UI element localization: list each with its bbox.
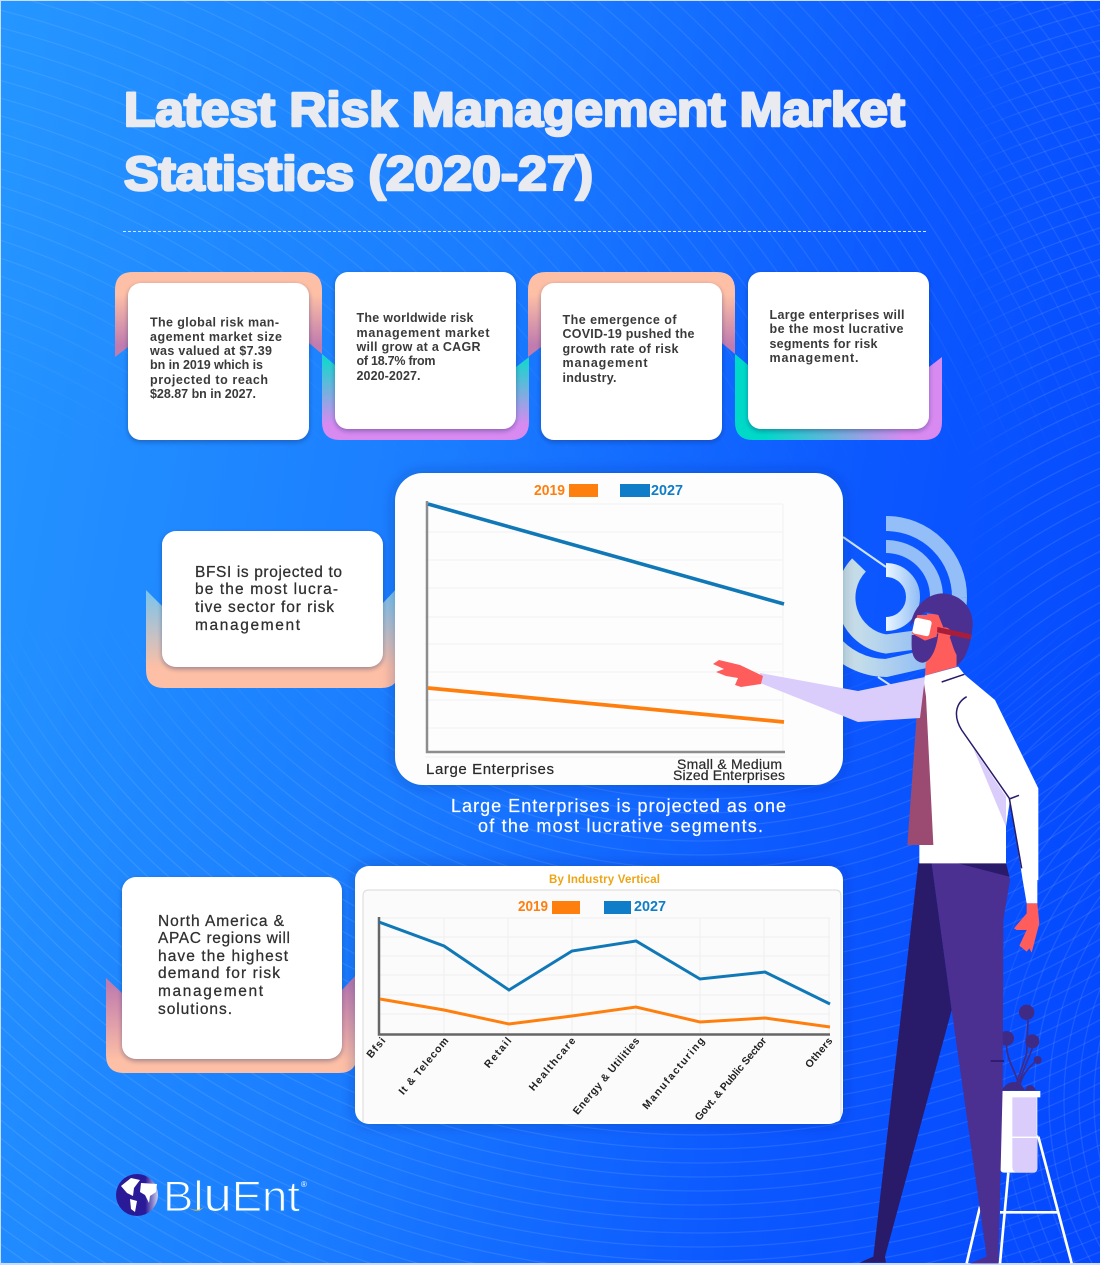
BFSI text: management — [195, 617, 301, 634]
North America text: management — [158, 983, 264, 1000]
BFSI text: tive sector for risk — [195, 599, 334, 616]
chart legend: 2027 — [651, 482, 683, 499]
line: 2019 — [428, 688, 784, 722]
pot — [1000, 1091, 1040, 1173]
North America text: solutions. — [158, 1001, 232, 1018]
COVID-19 text: management — [562, 356, 648, 370]
North America text: APAC regions will — [158, 930, 290, 947]
large enterprises text: Large enterprises will — [770, 308, 904, 322]
market size text: was valued at $7.39 — [149, 344, 272, 358]
panel: enterprise size line chart — [395, 473, 843, 785]
icon: concentric rings — [830, 524, 960, 685]
market size text: The global risk man- — [150, 316, 279, 330]
COVID-19 text: COVID-19 pushed the — [562, 327, 695, 341]
North America text — [158, 913, 290, 1018]
line: 2027 — [379, 922, 830, 1004]
CAGR text: management market — [356, 326, 490, 340]
large enterprises text — [770, 308, 904, 365]
panel: CAGR card — [322, 272, 529, 440]
caption: of the most lucrative segments. — [478, 816, 763, 836]
COVID-19 text: industry. — [562, 371, 616, 385]
category labels: It & Telecom — [396, 1035, 451, 1097]
hand — [713, 660, 763, 687]
title: Statistics (2020-27) — [124, 148, 593, 201]
line: 2019 — [380, 999, 830, 1027]
North America text: demand for risk — [158, 965, 280, 982]
title — [124, 84, 905, 201]
market size text — [149, 316, 282, 401]
trousers — [859, 863, 1039, 1263]
COVID-19 text: growth rate of risk — [562, 342, 679, 356]
category labels: Healthcare — [527, 1035, 578, 1093]
panel: large enterprises card — [735, 272, 942, 440]
CAGR text: of 18.7% from — [356, 354, 436, 368]
category labels: Retail — [482, 1035, 514, 1071]
illustration: presenter — [713, 593, 1039, 1263]
panel: BFSI card — [146, 531, 399, 688]
wordmark: BluEnt — [163, 1169, 300, 1222]
caption — [451, 796, 786, 836]
stool — [967, 1137, 1072, 1263]
arm — [760, 673, 925, 722]
panel: North America card — [106, 877, 357, 1073]
CAGR text: will grow at a CAGR — [356, 340, 480, 354]
chart legend: 2027 — [634, 898, 666, 915]
North America text: have the highest — [158, 948, 289, 965]
chart legend: 2019 — [518, 898, 548, 915]
CAGR text: 2020-2027. — [356, 369, 420, 383]
illustration: plant stool — [967, 1005, 1072, 1263]
tie — [907, 678, 933, 845]
large enterprises text: management. — [770, 351, 858, 365]
panel: market size card — [115, 272, 322, 440]
icon: globe — [116, 1174, 158, 1216]
chart title: By Industry Vertical — [549, 874, 660, 886]
category labels: Others — [803, 1035, 835, 1071]
market size text: bn in 2019 which is — [150, 358, 263, 372]
line: 2027 — [428, 504, 784, 604]
axis labels: Small & Medium — [677, 756, 782, 772]
title: Latest Risk Management Market — [124, 84, 905, 137]
CAGR text: The worldwide risk — [356, 311, 474, 325]
caption: Large Enterprises is projected as one — [451, 796, 786, 816]
shirt — [919, 667, 1038, 880]
plant — [999, 1005, 1042, 1091]
category labels: Energy & Utilities — [571, 1035, 642, 1117]
panel: industry vertical line chart — [355, 866, 843, 1124]
North America text: North America & — [158, 913, 285, 930]
axis labels — [426, 756, 785, 783]
chart axes — [427, 501, 785, 752]
large enterprises text: be the most lucrative — [770, 322, 904, 336]
category labels: Bfsi — [364, 1035, 388, 1061]
BFSI text: be the most lucra- — [195, 581, 338, 598]
BFSI text — [195, 564, 342, 634]
CAGR text — [356, 311, 490, 383]
chart axes — [379, 917, 830, 1034]
category labels: Govt. & Public Sector — [693, 1035, 769, 1123]
logo: BluEnt — [116, 1169, 307, 1222]
category labels: Manufacturing — [640, 1035, 707, 1112]
BFSI text: BFSI is projected to — [195, 564, 342, 581]
chart legend — [518, 898, 666, 915]
category labels — [364, 1035, 835, 1123]
logo: BluEnt: ® — [301, 1180, 307, 1189]
COVID-19 text — [562, 313, 695, 385]
market size text: agement market size — [150, 330, 282, 344]
market size text: $28.87 bn in 2027. — [150, 387, 256, 401]
head — [910, 593, 973, 676]
panel: COVID-19 card — [528, 272, 735, 440]
axis labels: Sized Enterprises — [673, 767, 785, 783]
large enterprises text: segments for risk — [770, 337, 878, 351]
chart legend — [534, 482, 683, 499]
chart legend: 2019 — [534, 482, 565, 499]
market size text: projected to reach — [150, 373, 268, 387]
COVID-19 text: The emergence of — [562, 313, 677, 327]
axis labels: Large Enterprises — [426, 761, 554, 778]
